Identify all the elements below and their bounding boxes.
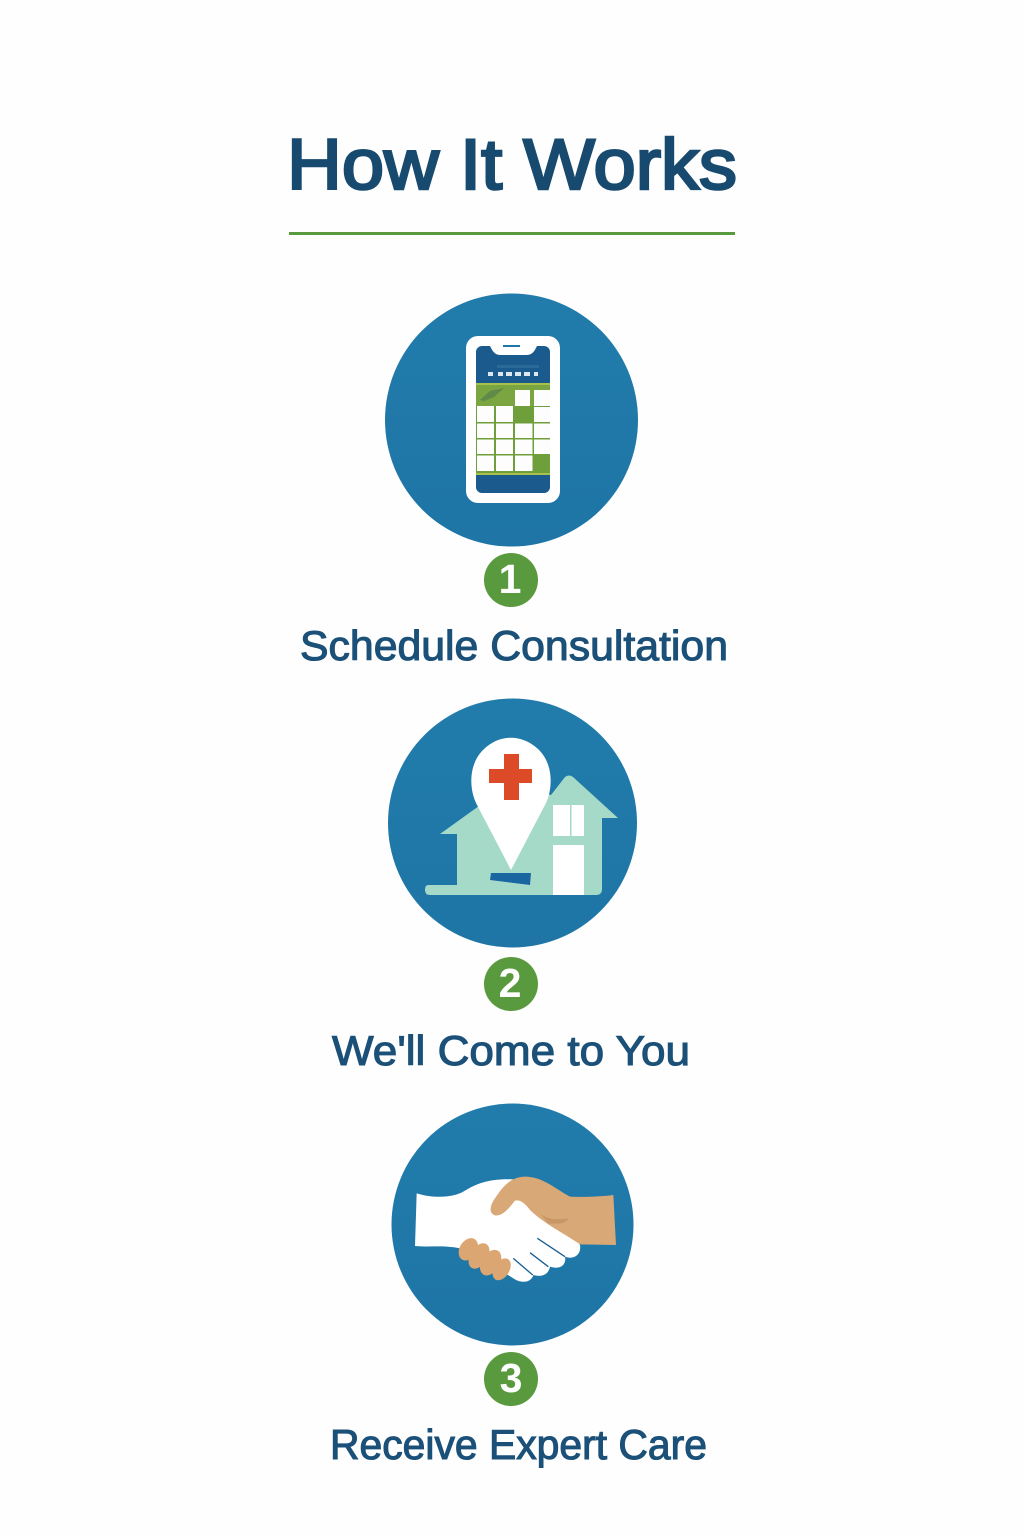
- number badge 1: [484, 553, 538, 607]
- icon: red cross: [489, 754, 532, 800]
- number badge 1: 1: [499, 556, 521, 602]
- step 1: schedule consultation: [300, 294, 728, 669]
- title: How It Works: [287, 126, 737, 205]
- step 1 label: Schedule Consultation: [300, 622, 728, 669]
- icon: house with location pin: [388, 698, 637, 948]
- icon: phone with calendar: [385, 294, 638, 546]
- icon: handshake: [392, 1104, 634, 1346]
- step 2 label: We'll Come to You: [332, 1027, 690, 1074]
- step 2: we'll come to you: [332, 698, 690, 1074]
- number badge 2: 2: [499, 960, 521, 1006]
- number badge 3: 3: [500, 1355, 522, 1401]
- step 3 label: Receive Expert Care: [330, 1421, 707, 1468]
- number badge 2: [484, 957, 538, 1011]
- step 3: receive expert care: [330, 1104, 707, 1468]
- icon: location pin: [471, 738, 551, 870]
- number badge 3: [484, 1352, 538, 1406]
